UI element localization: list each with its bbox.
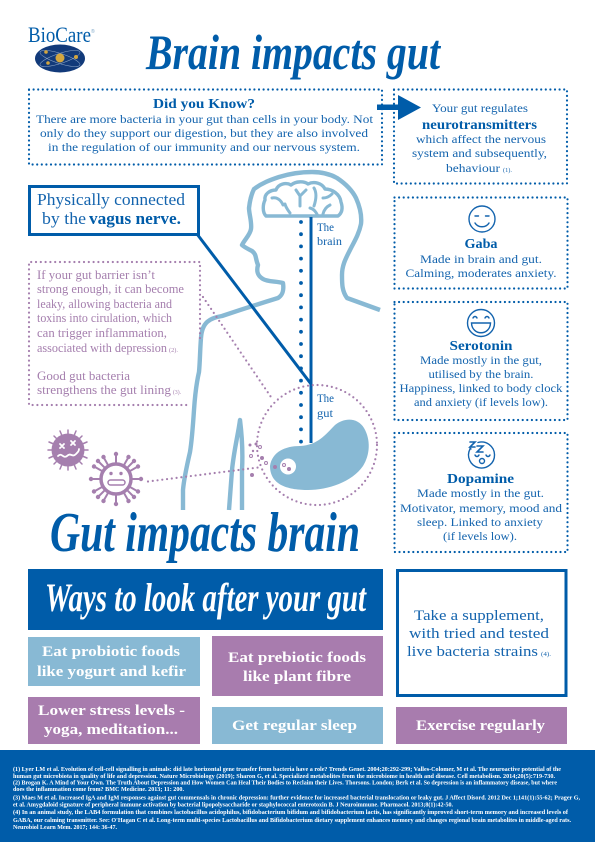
panel: dopamine: sleep. Linked to anxiety (417, 515, 543, 529)
panel: gut barrier: Good gut bacteria (37, 369, 130, 383)
panel: dopamine (394, 433, 568, 552)
panel: serotonin: utilised by the brain. (428, 367, 534, 381)
box: take a supplement: Take a supplement, (414, 608, 544, 624)
icon: stomach (270, 420, 369, 490)
footer: references (0, 750, 595, 842)
panel: dopamine: Motivator, memory, mood and (400, 501, 562, 515)
panel: dopamine: (if levels low). (443, 529, 517, 543)
panel: serotonin: Serotonin (450, 338, 513, 353)
banner: ways to look after your gut (28, 569, 383, 630)
panel: gut barrier: (3). (173, 389, 181, 396)
callout: vagus nerve (30, 186, 198, 234)
callout: vagus nerve: by the (42, 209, 86, 228)
panel: gaba: Gaba (464, 236, 498, 251)
icon: germ one (48, 430, 88, 470)
dotted line: gut-brain axis (299, 222, 303, 443)
panel: gut barrier: (2). (169, 347, 179, 354)
panel: did you know: There are more bacteria in your gut than cells in your body. Not (36, 112, 374, 126)
box: lower stress levels: yoga, meditation... (44, 722, 178, 738)
footer: references: Neurobiol Learn Mem. 2017; 144: 36-47. (13, 824, 117, 831)
footer: references: (1) Lyer LM et al. Evolution of cell-cell signalling in animals: did late horizontal gene transfer from bacteria have a role? Trends Genet. 2004;20:292-299; Valles-Colomer, M et al. The neuroactive potential of the (13, 766, 561, 773)
panel: gut barrier: strong enough, it can become (37, 282, 184, 296)
box: take a supplement (398, 570, 566, 696)
panel: did you know: in the regulation of our immunity and our nervous system. (48, 140, 360, 154)
heading: Gut impacts brain: Gut impacts brain (50, 502, 360, 564)
icon: brain (263, 182, 342, 216)
panel: did you know: only do they support our digestion, but they are also involved (40, 126, 368, 140)
icon: laughing face (468, 310, 494, 336)
panel: gut barrier (29, 262, 200, 405)
box: get regular sleep (212, 707, 383, 744)
panel: gaba: Made in brain and gut. (420, 252, 542, 266)
panel: gut barrier: If your gut barrier isn’t (37, 268, 156, 282)
box: eat prebiotic foods: like plant fibre (243, 669, 352, 685)
footer: references: et al. Amygdaloid signature of peripheral immune activation by bacterial lipopolysaccharide or staphylococcal enterotoxin B. J Neuroimmune. Pharmacol. 2013;8(1):42-50. (13, 802, 453, 808)
box: lower stress levels: Lower stress levels - (38, 703, 185, 719)
callout: vagus nerve: vagus nerve. (89, 209, 181, 228)
arrow: to neurotransmitters (377, 95, 421, 120)
box: get regular sleep: Get regular sleep (232, 718, 357, 734)
title: Brain impacts gut: Brain impacts gut (145, 24, 442, 80)
box: exercise regularly (396, 707, 567, 744)
label: the brain (317, 220, 342, 248)
box: take a supplement: (4). (541, 651, 552, 658)
box: eat probiotic foods: like yogurt and kefir (37, 664, 187, 680)
label: the brain: The (317, 220, 334, 234)
footer: references: does the inflammation come from? BMC Medicine. 2013; 11: 200. (13, 786, 184, 793)
panel: serotonin: Happiness, linked to body clock (400, 381, 562, 395)
panel: serotonin: Made mostly in the gut, (420, 353, 542, 367)
logo: BioCare: BioCare (28, 22, 91, 47)
label: the gut (317, 391, 334, 420)
box: lower stress levels (28, 697, 200, 744)
panel: neurotransmitters: system and subsequently, (412, 146, 547, 160)
panel: neurotransmitters: behaviour (446, 161, 500, 175)
panel: dopamine: Made mostly in the gut. (417, 486, 544, 500)
panel: serotonin (394, 302, 568, 420)
footer: references: (4) In an animal study, the LAB4 formulation that combines lactobacillus acidophilus, bifidobacterium bifidum and bifidobacterium lactis, has significantly improved short-term memory and increased levels of (13, 809, 569, 816)
panel: neurotransmitters: neurotransmitters (422, 117, 537, 132)
panel: neurotransmitters: which affect the nervous (416, 132, 546, 146)
bacteria particles (248, 442, 291, 477)
panel: neurotransmitters: Your gut regulates (432, 101, 528, 115)
dotted circle: gut close-up (257, 385, 377, 505)
dotted connector: bacteria to gut (148, 467, 262, 482)
box: eat prebiotic foods (212, 636, 383, 696)
panel: neurotransmitters (394, 90, 567, 184)
panel: did you know: Did you Know? (153, 96, 255, 111)
panel: neurotransmitters: (1). (503, 167, 513, 174)
icon: sleeping face (469, 442, 495, 468)
label: the gut: gut (317, 406, 334, 420)
footer: references: (3) Maes M et al. Increased IgA and IgM responses against gut commensals in chronic depression: further evidence for increased bacterial translocation or leaky gut. J Affect Disord. 2012 Dec 1;141(1):55-62; Prager G, (13, 794, 580, 802)
callout: vagus nerve: Physically connected (37, 190, 186, 209)
vagus nerve line (197, 217, 311, 443)
box: eat prebiotic foods: Eat prebiotic foods (228, 650, 366, 666)
panel: gut barrier: can trigger inflammation, (37, 326, 167, 340)
panel: gut barrier: leaky, allowing bacteria and (37, 297, 173, 311)
panel: gaba (394, 198, 568, 288)
box: take a supplement: with tried and tested (409, 626, 550, 642)
panel: serotonin: and anxiety (if levels low). (414, 395, 548, 409)
logo: BioCare: ® (91, 28, 95, 35)
footer: references: (2) Brogan K. A Mind of Your Own. The Truth About Depression and How Women Can Heal Their Bodies to Reclaim their Lives. Thorsons. London; Berk et al. So depression is an inflammatory disease, but where (13, 780, 557, 786)
panel: dopamine: Dopamine (447, 471, 514, 486)
logo: BioCare (28, 22, 95, 72)
panel: did you know (29, 90, 382, 164)
footer: references: human gut microbiota in quality of life and depression. Nature Microbiology (2019); Sharon G, et al. Specialized metabolites from the microbiome in health and disease. Cell metabolism. 2014;20(5):719-730. (13, 773, 555, 780)
panel: gaba: Calming, moderates anxiety. (406, 266, 556, 280)
box: eat probiotic foods (28, 637, 200, 686)
footer: references: GABA, our calming transmitter. See: O'Hagan C et al. Long-term multi-species Lactobacillus and Bifidobacterium dietary supplement enhances memory and changes regional brain metabolites in middle-aged rats. (13, 817, 571, 824)
figure: head and body outline (183, 172, 380, 510)
dotted connector: barrier to gut (203, 297, 273, 400)
icon: smile face (469, 206, 495, 232)
banner: ways to look after your gut: Ways to look after your gut (45, 575, 367, 620)
panel: gut barrier: toxins into cirulation, which (37, 311, 173, 325)
panel: gut barrier: strengthens the gut lining (37, 383, 172, 397)
box: exercise regularly: Exercise regularly (416, 718, 546, 734)
box: take a supplement: live bacteria strains (407, 644, 538, 660)
label: the brain: brain (317, 234, 342, 248)
label: the gut: The (317, 391, 334, 405)
icon: germ two (89, 452, 143, 506)
box: eat probiotic foods: Eat probiotic foods (42, 644, 180, 660)
panel: gut barrier: associated with depression (37, 341, 168, 355)
